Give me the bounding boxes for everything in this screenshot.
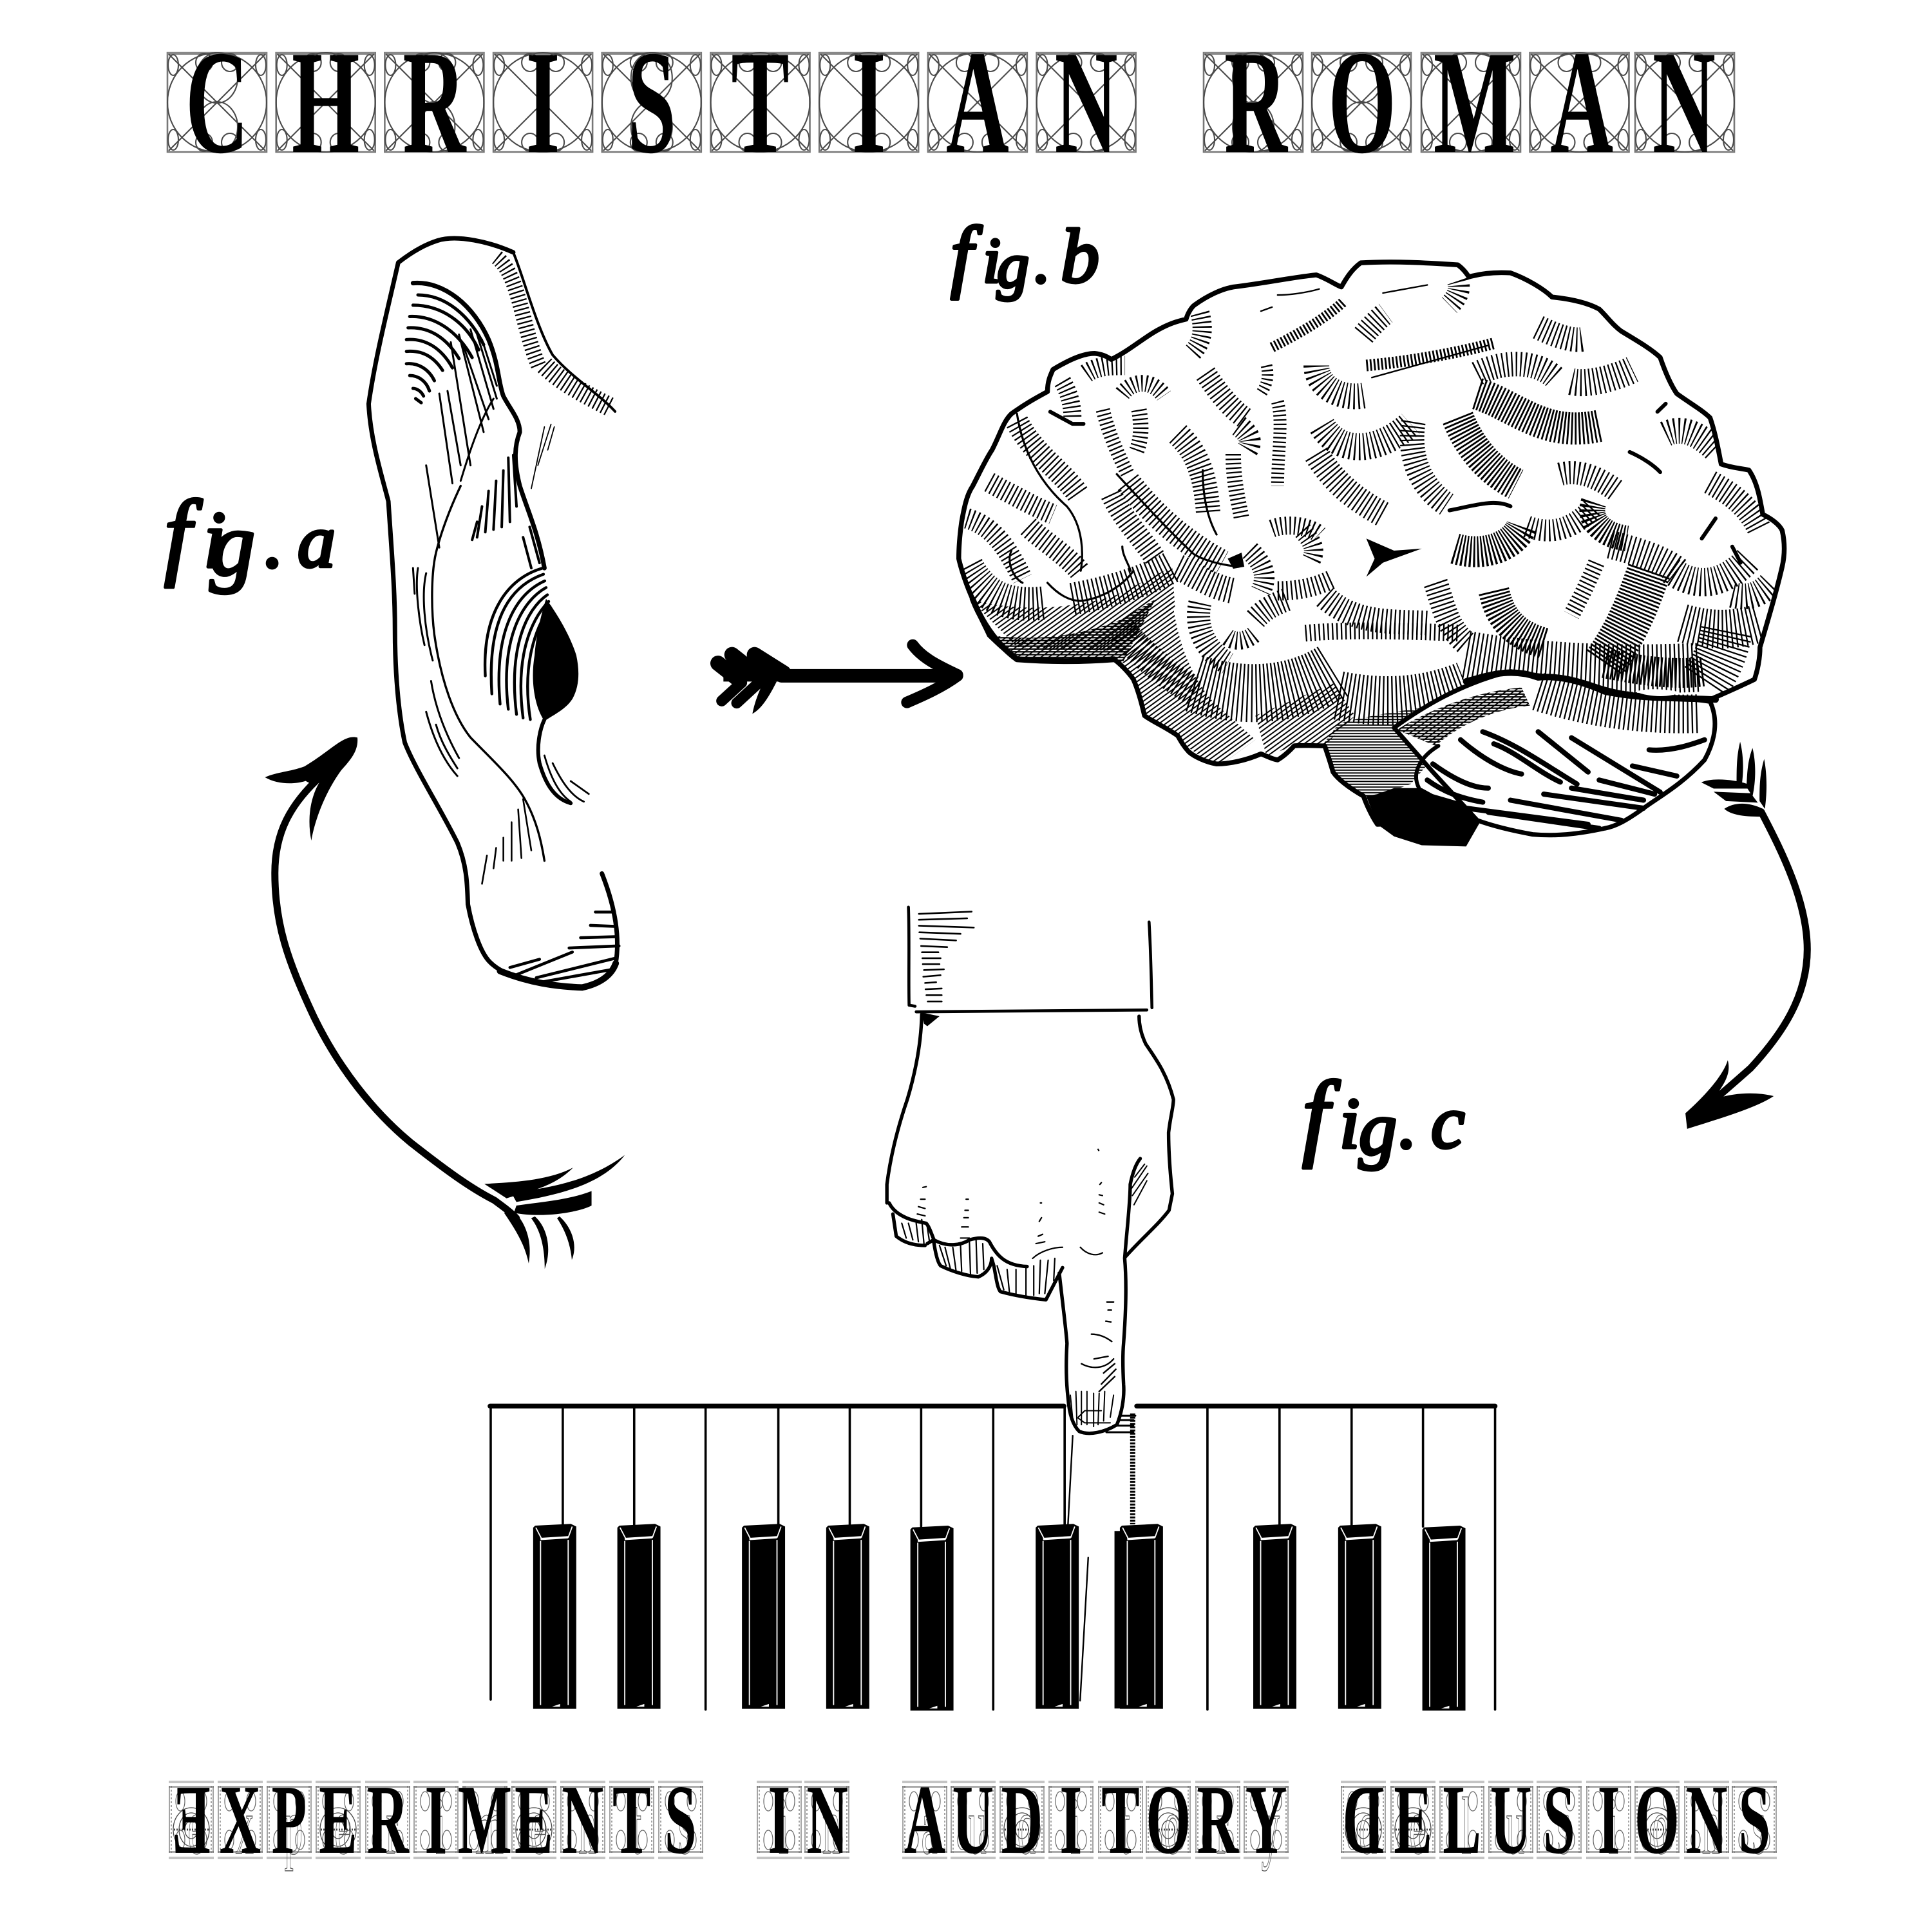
label: fig. b: f — [951, 211, 983, 300]
title lettering: CHRISTIAN — [185, 20, 1118, 184]
black keys — [533, 1524, 1466, 1710]
brain stem — [1367, 788, 1480, 846]
hand outline — [887, 1014, 1173, 1434]
label: fig. c: c — [1431, 1080, 1464, 1164]
label: fig. a: f — [164, 481, 202, 588]
gyri hatching — [967, 281, 1771, 800]
title guide cells — [167, 53, 1734, 152]
shirt cuff — [909, 907, 1152, 1027]
white key dividers — [491, 1406, 1495, 1710]
subtitle capitals: ELUSIONS — [1394, 1765, 1770, 1875]
label: fig. b: i — [983, 225, 1001, 296]
subtitle faint lowercase layer: delusions — [1359, 1782, 1766, 1871]
cerebellum — [1394, 671, 1716, 835]
subtitle guide cells — [169, 1781, 1777, 1859]
subtitle capitals: AUDITORY — [904, 1765, 1287, 1875]
arrow: ear to brain — [718, 645, 958, 714]
depressed key — [1068, 1414, 1135, 1701]
label: fig. b: . — [1034, 225, 1050, 296]
subtitle faint lowercase layer: experiments — [188, 1782, 692, 1871]
subtitle: Experiments in Auditory Delusions — [169, 1765, 1777, 1875]
knuckle hatching — [902, 1220, 1055, 1295]
title lettering: ROMAN — [1224, 20, 1716, 184]
mirrored initial E: E — [172, 1765, 211, 1875]
illustration: hand pressing a key — [887, 907, 1173, 1435]
arrow: hand to ear — [265, 737, 625, 1269]
cerebrum outline — [959, 262, 1785, 824]
finger creases — [1081, 1302, 1116, 1392]
label: fig. a: i — [204, 496, 226, 585]
key lid bar — [490, 1404, 1495, 1408]
subtitle capitals: XPERIMENTS — [220, 1765, 697, 1875]
label: fig. c: . — [1399, 1084, 1417, 1164]
mirrored initial D: D — [1343, 1765, 1384, 1875]
label: fig. a: g — [210, 495, 255, 594]
sulcus lines and dark accents — [972, 285, 1741, 661]
arrow: brain to hand — [1685, 742, 1807, 1129]
subtitle capitals: IN — [768, 1765, 848, 1875]
label: fig. c: i — [1340, 1084, 1359, 1164]
illustration: ear — [368, 238, 619, 987]
label: fig. c: g — [1359, 1086, 1397, 1171]
subtitle faint lowercase layer: auditory — [922, 1782, 1280, 1871]
label: fig. b: g — [997, 230, 1029, 301]
label: fig. a: a — [298, 499, 336, 583]
label: fig. a: . — [264, 496, 284, 585]
illustration: brain — [959, 262, 1785, 846]
subtitle faint lowercase layer: in — [779, 1782, 840, 1871]
label: fig. b: b — [1061, 213, 1099, 299]
title: Christian Roman — [167, 20, 1734, 184]
piano keyboard — [490, 1406, 1495, 1710]
label: fig. c: f — [1302, 1062, 1340, 1169]
